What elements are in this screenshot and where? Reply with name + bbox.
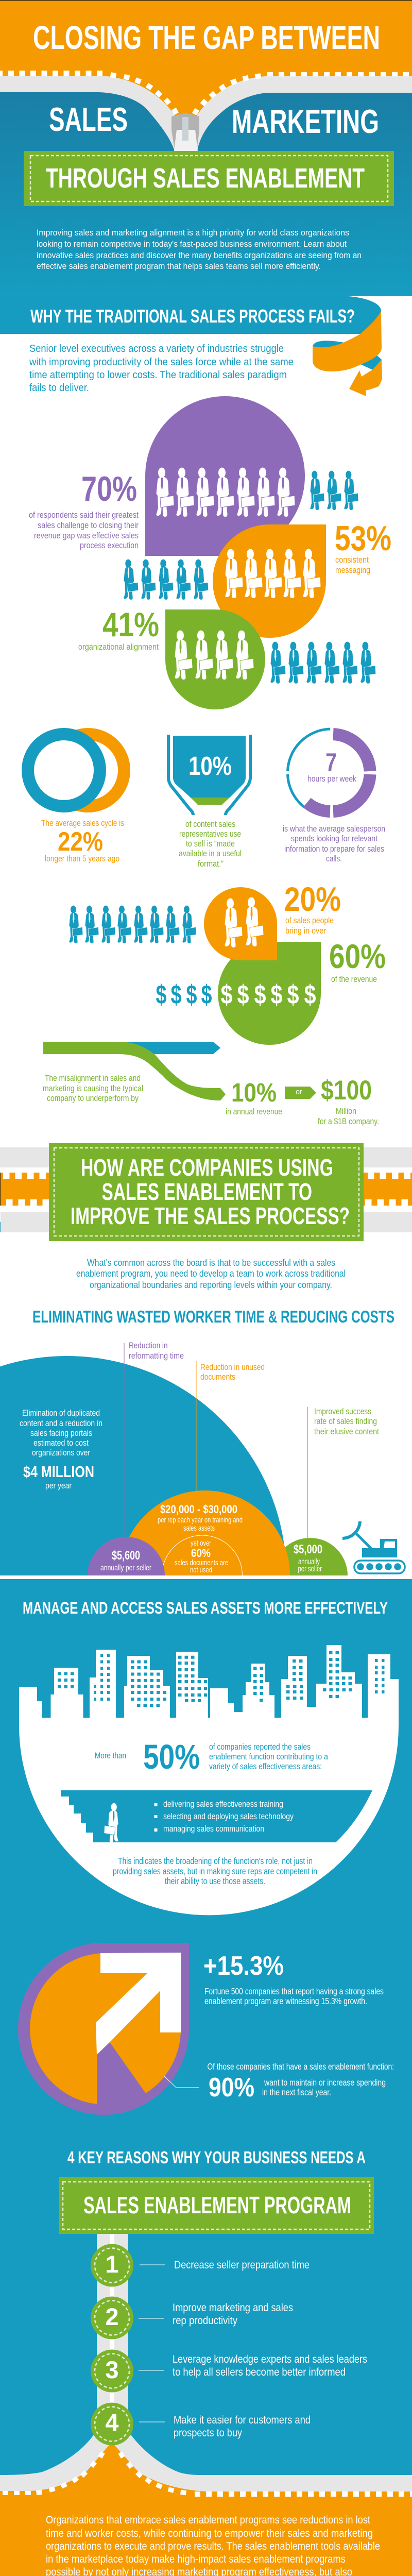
text: $4 million: content and a reduction in	[20, 1418, 102, 1428]
stat: 20% of sales people: 20%	[284, 880, 341, 918]
text: 10% of content: of content sales	[185, 819, 235, 829]
text: $4 million	[20, 1408, 102, 1490]
zipper tapes and teeth	[0, 71, 412, 151]
chart: 41% green teardrop	[165, 609, 265, 709]
stat: 60% of the revenue: 60%	[329, 937, 386, 975]
stat: 70%: process execution	[80, 540, 139, 550]
text: 10% of content: representatives use	[179, 829, 241, 839]
text: $5,000: $5,000	[294, 1543, 322, 1556]
text: $20,000 - $30,000: $20,000 - $30,000	[160, 1503, 237, 1516]
reason 4: prospects to buy	[174, 2427, 242, 2439]
text: what's common: enablement program, you need to develop a team to work across traditional	[76, 1268, 346, 1279]
stat: 53%: messaging	[335, 565, 370, 575]
panel: hero header	[0, 0, 412, 296]
stat: 70%: 70%	[81, 469, 137, 509]
reason 1	[91, 2244, 310, 2286]
label: sales: SALES	[49, 100, 128, 138]
stat: 70%	[29, 469, 139, 550]
label: improved success	[314, 1406, 379, 1436]
label: unused documents: documents	[200, 1372, 235, 1382]
stat: +15.3%	[203, 1951, 384, 2006]
chart: 60% green teardrop with dollars: $	[271, 980, 283, 1010]
list: effectiveness areas: selecting and deploying sales technology	[163, 1811, 294, 1821]
people: teal row beside green	[270, 642, 376, 684]
illustration: skyline buildings	[19, 1645, 399, 1719]
reason 3: 3	[105, 2356, 119, 2383]
stat: 50%	[95, 1738, 328, 1776]
list: effectiveness areas	[154, 1799, 294, 1834]
text: 10% of content: available in a useful	[179, 849, 242, 858]
chart: growth arrow pie	[18, 1943, 189, 2115]
chart: 60% green teardrop with dollars: $	[254, 980, 266, 1010]
text: $4 million: Elimination of duplicated	[22, 1408, 100, 1418]
chart: 20% orange teardrop	[204, 887, 277, 960]
stat: 41%	[78, 605, 159, 652]
stat: 50%: 50%	[143, 1738, 200, 1776]
stat: 10% annual revenue	[226, 1078, 282, 1116]
label: reformatting time: reformatting time	[129, 1351, 184, 1361]
text: $4 million: organizations over	[32, 1448, 90, 1458]
chart: 60% green teardrop with dollars: $	[287, 980, 299, 1010]
icon: excavator	[342, 1521, 405, 1573]
chart: 7 hours ring	[287, 729, 370, 811]
text: $4 million: estimated to cost	[33, 1438, 89, 1448]
stat: 50%: enablement function contributing to a	[209, 1752, 328, 1761]
stat: 20% of sales people: bring in over	[285, 926, 326, 936]
stat: +15.3%: +15.3%	[203, 1951, 284, 1981]
chart: 70% purple teardrop	[145, 396, 305, 556]
text: what's common: What's common across the board is that to be successful with a sales	[87, 1257, 335, 1268]
list: effectiveness areas: delivering sales effectiveness training	[163, 1799, 283, 1809]
reason 3: Leverage knowledge experts and sales leaders	[173, 2353, 367, 2365]
text: $5,000: per seller	[298, 1565, 322, 1573]
text: misalignment: The misalignment in sales and	[45, 1073, 141, 1083]
text: $20,000 - $30,000	[158, 1503, 243, 1574]
panel: manage and access section background	[0, 1579, 412, 2496]
stat: 50%: variety of sales effectiveness areas:	[209, 1761, 322, 1771]
text: senior level executives: fails to deliver.	[29, 382, 89, 394]
stat: 90%: want to maintain or increase spending	[264, 2077, 386, 2088]
arrow: diverging blue and green bands	[43, 1042, 226, 1100]
stat: 41%: organizational alignment	[78, 642, 159, 652]
arrow: or: or	[296, 1088, 302, 1096]
text: closing paragraph: time and worker costs, while continuing to empower their sales and marketing	[46, 2528, 373, 2539]
text: salesperson time: spends looking for relevant	[291, 834, 377, 843]
dollars: teal row: $	[186, 980, 197, 1010]
chart: 7 hours ring: hours per week	[307, 774, 356, 784]
stat: $100 million: $100	[321, 1075, 372, 1106]
chart: 60% green teardrop with dollars: $	[237, 980, 249, 1010]
text: $4 million: sales facing portals	[30, 1428, 92, 1438]
chart: 60% green teardrop with dollars: $	[304, 980, 316, 1010]
text: broadening of function	[113, 1856, 317, 1886]
reason 2: Improve marketing and sales	[173, 2302, 293, 2314]
stat: 53%	[335, 519, 391, 575]
stat: +15.3%: enablement program are witnessing 15.3% growth.	[204, 1996, 367, 2006]
reason 4: Make it easier for customers and	[174, 2414, 311, 2426]
reason 4	[91, 2403, 311, 2445]
text: senior level executives: Senior level executives across a variety of industries struggle	[29, 343, 284, 354]
text: misalignment: marketing is causing the typical	[43, 1083, 143, 1093]
panel: ribbon heading	[0, 296, 382, 396]
stat: 22% sales cycle: 22%	[58, 827, 103, 857]
stat: 50%: More than	[95, 1751, 126, 1760]
label: reformatting time: Reduction in	[129, 1341, 168, 1350]
stat: 90%: in the next fiscal year.	[262, 2087, 331, 2097]
text: 10% of content	[179, 819, 242, 869]
stat: 70%: of respondents said their greatest	[29, 510, 139, 520]
text: $20,000 - $30,000: sales documents are	[175, 1558, 228, 1567]
text: $5,000: annually	[298, 1557, 320, 1566]
text: closing paragraph: Organizations that embrace sales enablement programs see reductions in lost	[46, 2514, 370, 2526]
chart: 53% orange teardrop	[213, 524, 326, 638]
stat: 60% of the revenue	[329, 937, 386, 984]
icon: funnel	[168, 735, 250, 815]
label: unused documents	[200, 1362, 265, 1382]
text: closing paragraph: in the marketplace today make high-impact sales enablement programs	[46, 2553, 346, 2565]
intro paragraph: Improving sales and marketing alignment is a high priority for world class organizations	[37, 228, 349, 238]
icon: person on stairs	[104, 1803, 118, 1842]
reason 2: rep productivity	[173, 2315, 237, 2327]
people: teal row beside orange	[124, 560, 209, 600]
stat: 90%	[164, 2061, 394, 2103]
icon: overlapping rings	[22, 728, 124, 812]
chart: 60% green teardrop with dollars: $	[220, 980, 233, 1010]
stat: 41%: 41%	[102, 605, 159, 643]
label: improved success: their elusive content	[314, 1427, 379, 1436]
text: senior level executives	[29, 343, 294, 394]
stat: 70%: sales challenge to closing their	[38, 520, 139, 530]
stat: $100 million: for a $1B company.	[318, 1116, 379, 1126]
text: salesperson time	[283, 824, 385, 863]
panel: closed zipper band	[0, 1147, 412, 1232]
text: 10% of content: to sell is “made	[186, 839, 235, 849]
icon: zipper slider	[171, 113, 199, 151]
text: $5,600: annually per seller	[100, 1564, 152, 1572]
chart: 60% green teardrop with dollars	[218, 942, 321, 1045]
label: reformatting time	[129, 1341, 184, 1361]
banner: how are companies: SALES ENABLEMENT TO	[102, 1178, 312, 1205]
banner: sales enablement program	[59, 2177, 374, 2234]
label: improved success: Improved success	[314, 1406, 371, 1416]
stat: 60% of the revenue: of the revenue	[331, 974, 377, 984]
icon: funnel: 10%	[188, 751, 232, 781]
stat: 53%: 53%	[335, 519, 391, 558]
text: salesperson time: is what the average salesperson	[283, 824, 385, 834]
text: $20,000 - $30,000: per rep each year on training and	[158, 1516, 243, 1524]
intro paragraph: effective sales enablement program that helps sales teams sell more efficiently.	[37, 261, 321, 271]
text: senior level executives: time attempting to lower costs. The traditional sales paradigm	[29, 369, 287, 381]
intro paragraph	[37, 228, 362, 271]
people: teal row beside purple	[310, 471, 358, 510]
chart: 7 hours ring: 7	[325, 748, 337, 777]
stat: 20% of sales people: of sales people	[285, 916, 334, 925]
reason 1: 1	[105, 2250, 119, 2278]
reason 4: 4	[105, 2409, 119, 2436]
stat: 22% sales cycle	[41, 818, 124, 863]
stat: 10% annual revenue: 10%	[231, 1078, 277, 1107]
text: broadening of function: their ability to use those assets.	[165, 1876, 265, 1886]
reason 3: to help all sellers become better informed	[173, 2366, 346, 2378]
text: $20,000 - $30,000: sales assets	[183, 1524, 215, 1533]
text: $20,000 - $30,000: 60%	[191, 1547, 211, 1560]
banner: how are companies	[49, 1143, 364, 1241]
dollars: teal row: $	[171, 980, 182, 1010]
label: unused documents: Reduction in unused	[200, 1362, 265, 1372]
arrow: orange ribbon	[313, 311, 382, 396]
reason 1: Decrease seller preparation time	[174, 2259, 310, 2271]
text: $20,000 - $30,000: not used	[190, 1566, 212, 1574]
stat: 90%: 90%	[209, 2073, 254, 2103]
list: effectiveness areas: managing sales communication	[163, 1824, 264, 1834]
intro paragraph: innovative sales practices and discover the many benefits organizations are seeing from an	[37, 250, 362, 260]
reason 3	[91, 2349, 367, 2393]
text: closing paragraph	[46, 2514, 380, 2576]
stat: $100 million: Million	[336, 1106, 356, 1116]
text: what's common	[76, 1257, 346, 1290]
text: $4 million: per year	[45, 1481, 72, 1490]
text: misalignment	[43, 1073, 143, 1103]
text: broadening of function: providing sales assets, but in making sure reps are competent in	[113, 1866, 317, 1876]
panel: bottom zipper	[0, 2231, 412, 2576]
dollars: teal row	[156, 980, 212, 1010]
panel: stairs list	[61, 1790, 372, 1842]
stat: 22% sales cycle: longer than 5 years ago	[45, 854, 119, 863]
text: salesperson time: information to prepare for sales	[284, 844, 384, 854]
arrow: or	[285, 1087, 316, 1099]
text: $5,000	[294, 1543, 322, 1573]
text: misalignment: company to underperform by	[47, 1093, 139, 1103]
reason 2: 2	[105, 2303, 119, 2330]
stat: 22% sales cycle: The average sales cycle is	[41, 818, 124, 828]
text: $5,600: $5,600	[112, 1549, 140, 1563]
text: senior level executives: with improving productivity of the sales force while at the same	[29, 356, 294, 368]
stat: 20% of sales people	[284, 880, 341, 936]
text: $20,000 - $30,000: yet over	[191, 1539, 211, 1548]
label: improved success: rate of sales finding	[314, 1416, 377, 1426]
reason 2	[91, 2297, 293, 2339]
stat: 50%: of companies reported the sales	[209, 1742, 311, 1752]
intro paragraph: looking to remain competitive in today's fast-paced business environment. Learn about	[37, 239, 347, 249]
text: $4 million: $4 MILLION	[23, 1463, 94, 1481]
stat: 53%: consistent	[335, 555, 369, 565]
banner: through sales enablement	[24, 151, 394, 206]
dollars: teal row: $	[156, 980, 167, 1010]
people: teal row of eight	[69, 906, 196, 943]
text: salesperson time: calls.	[326, 854, 342, 863]
dollars: teal row: $	[201, 980, 212, 1010]
stat: 10% annual revenue: in annual revenue	[226, 1107, 282, 1116]
chart: nested cost semicircles	[0, 1342, 379, 1575]
text: $5,600	[100, 1549, 152, 1572]
text: broadening of function: This indicates the broadening of the function's role, not just in	[118, 1856, 313, 1866]
text: 10% of content: format.”	[198, 859, 224, 869]
stat: 70%: revenue gap was effective sales	[34, 531, 139, 540]
stat: $100 million	[318, 1075, 379, 1126]
text: what's common: organizational boundaries and reporting levels within your company.	[90, 1279, 332, 1290]
panel: city skyline and white bowl	[19, 1645, 399, 1915]
